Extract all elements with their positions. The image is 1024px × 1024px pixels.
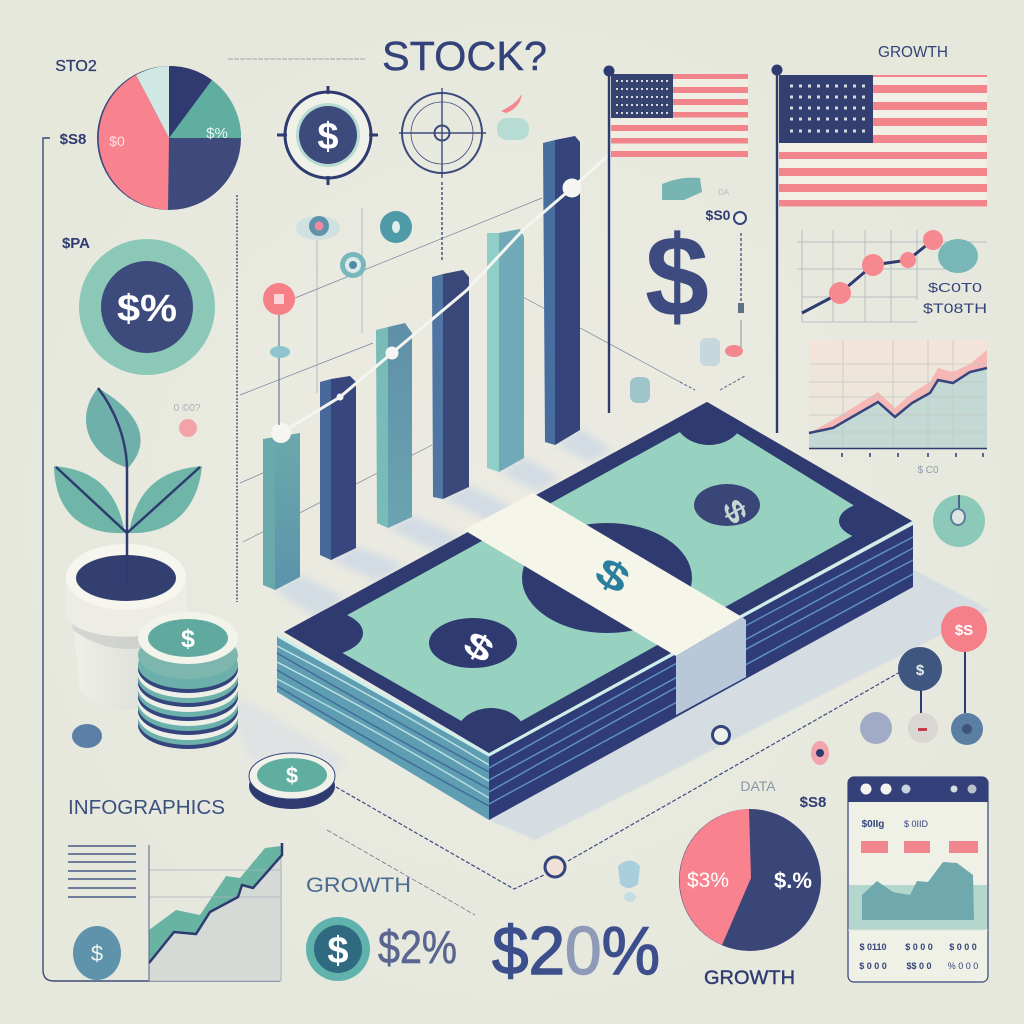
small chart markers xyxy=(263,211,412,425)
dashboard card: $0IIg xyxy=(862,819,884,830)
money stack xyxy=(259,387,919,820)
label: top-right growth: GROWTH xyxy=(878,44,948,61)
small teal tag xyxy=(662,178,730,200)
cash shadow xyxy=(489,570,990,840)
bar shadows xyxy=(275,428,612,618)
flag: right xyxy=(772,64,987,433)
mini line chart: $C0T0 xyxy=(928,280,982,295)
teal pin circle xyxy=(933,495,985,547)
coin dollar: $ xyxy=(327,930,349,972)
percent figure: $2% xyxy=(378,921,457,973)
small pink note xyxy=(174,403,201,437)
heading: infographics: INFOGRAPHICS xyxy=(68,797,225,819)
pie chart: top left: $% xyxy=(206,125,228,142)
dashboard card: $ 0 0 0 xyxy=(859,961,887,971)
paper band xyxy=(464,493,742,656)
plant xyxy=(54,388,202,710)
amount label: $S8 xyxy=(800,794,826,811)
area chart panel xyxy=(809,340,987,476)
big dollar sign: $ xyxy=(645,213,709,341)
small icon xyxy=(72,724,102,748)
top banknote xyxy=(284,402,912,753)
data label: DATA xyxy=(740,778,776,794)
money stack: $ xyxy=(588,549,637,603)
label: left amount: $S8 xyxy=(60,131,86,148)
growth label: GROWTH xyxy=(306,874,411,897)
banknote corners xyxy=(284,402,912,753)
title: STOCK? xyxy=(382,33,547,79)
small label and pin: $S0 xyxy=(706,207,731,223)
flag: centre xyxy=(604,66,748,413)
flat coin: $ xyxy=(286,763,298,788)
small pink drop xyxy=(497,94,529,140)
label: SPA: $PA xyxy=(62,235,90,252)
bar 4 xyxy=(432,270,469,499)
small pink note: 0 ©0? xyxy=(174,403,201,414)
stack right face xyxy=(489,525,913,820)
small node icons xyxy=(712,726,829,765)
growth area chart xyxy=(149,843,282,981)
pot xyxy=(66,544,190,710)
pink leader xyxy=(327,830,475,915)
frame lines xyxy=(43,138,442,981)
network of nodes xyxy=(860,606,987,745)
coin bottom left xyxy=(73,926,121,980)
crosshair icon xyxy=(399,88,486,178)
network of nodes: $S xyxy=(955,622,973,639)
dashboard card: $ 0 0 0 xyxy=(905,942,933,952)
small teal tag: DA xyxy=(718,188,730,197)
dashboard card: $$ 0 0 xyxy=(906,961,932,971)
money stack: $ xyxy=(716,494,753,529)
coin bottom left: $ xyxy=(91,941,103,966)
bar 6 xyxy=(543,136,580,445)
bottom pie chart: $.% xyxy=(774,868,812,893)
node and cup xyxy=(545,857,640,902)
flat coin xyxy=(249,753,335,809)
faint subtitle line xyxy=(228,58,365,60)
area chart panel: $ C0 xyxy=(917,465,939,476)
chart grid xyxy=(240,198,680,542)
bar 2 xyxy=(320,376,356,560)
dashed leader xyxy=(336,672,900,889)
coin dollar xyxy=(306,917,370,981)
bar 5 xyxy=(487,229,524,472)
growth trend line xyxy=(271,152,612,443)
growth caption: GROWTH xyxy=(704,968,795,989)
pie chart: top left xyxy=(97,66,241,210)
label: top-left code: STO2 xyxy=(55,58,97,75)
dashboard card xyxy=(848,777,988,982)
pie chart: top left: $0 xyxy=(109,133,125,149)
coin stack xyxy=(138,612,238,749)
dashed leader right xyxy=(680,376,745,390)
stack left face xyxy=(277,636,489,820)
mini line chart: $T08TH xyxy=(923,300,987,316)
dollar target icon: $ xyxy=(317,116,339,158)
bottom pie chart xyxy=(679,809,821,951)
growth bar chart xyxy=(263,136,580,590)
donut percent badge xyxy=(79,239,215,375)
donut percent badge: $% xyxy=(117,288,177,330)
main figure: $20% xyxy=(492,913,660,989)
coin stack: $ xyxy=(181,625,195,653)
bar 1 xyxy=(263,433,300,590)
network of nodes: $ xyxy=(916,662,925,679)
bottom pie chart: $3% xyxy=(687,869,729,892)
money stack: $ xyxy=(457,624,500,671)
mini line chart xyxy=(797,230,987,322)
text lines icon xyxy=(68,846,136,897)
bar 3 xyxy=(376,323,412,528)
small label and pin xyxy=(630,207,746,403)
dashboard card: $ 0 0 0 xyxy=(949,942,977,952)
dashboard card: % 0 0 0 xyxy=(948,961,978,971)
dashboard card: $ 0110 xyxy=(859,942,887,952)
dashboard card: $ 0IID xyxy=(904,819,929,829)
coin shadow xyxy=(225,700,345,790)
dollar target icon xyxy=(277,86,378,185)
